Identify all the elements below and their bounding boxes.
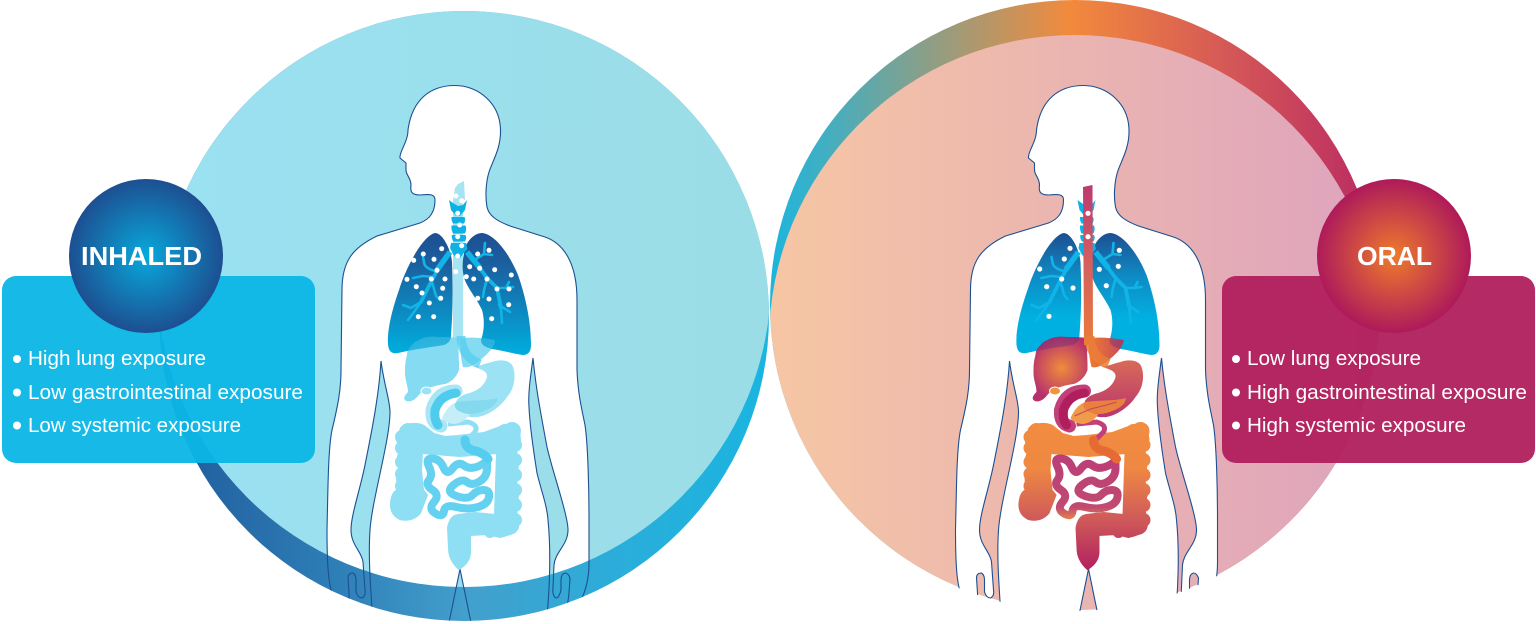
organ overlap over lungs [408,336,495,351]
lung overlap on liver [1036,336,1124,351]
duodenum outer [1060,391,1084,426]
liver lobe [460,338,495,367]
airway particles: inhaled [404,194,514,321]
oral bullet list [1232,348,1527,437]
esophagus: oral [1083,185,1093,345]
inhaled bullet list: High lung exposure [28,348,206,370]
liver [404,337,459,401]
inhaled bullet list [13,348,303,437]
colon [1019,423,1150,569]
pancreas head [1070,402,1098,424]
oral bullet list: High systemic exposure [1247,415,1466,437]
pancreas [1083,398,1126,414]
oral bullet list: High gastrointestinal exposure [1247,382,1527,404]
airway particles: oral [1037,211,1122,319]
small intestine [1056,458,1118,515]
liver [1033,337,1088,401]
inhaled bullet list: Low systemic exposure [28,415,241,437]
badge: oral: ORAL [1357,241,1432,271]
duodenum inner [435,393,456,425]
body silhouette: inhaled [327,86,589,624]
pancreas head [442,402,470,424]
ring: oral crescent [770,0,1380,610]
panel: oral route circle [770,0,1380,624]
panel: inhaled route circle [159,11,769,624]
fundus [461,336,480,364]
liver lobe [1088,338,1124,367]
colon [391,423,521,569]
badge: inhaled: INHALED [81,241,202,271]
stomach [456,360,515,417]
badge: oral [1317,179,1471,333]
badge: inhaled [69,179,223,333]
callout: inhaled exposure box [2,276,315,463]
connector to small intestine [1076,422,1105,441]
light blue circle background [159,11,769,621]
trachea: inhaled [449,200,468,258]
duodenum inner [1063,393,1084,425]
oral bullet list: Low lung exposure [1247,348,1421,370]
pancreatic duct [1074,402,1116,416]
connector to small intestine [448,422,476,441]
esophagus: inhaled [453,181,465,345]
trachea: oral [1078,200,1096,258]
internal organs: oral [1016,185,1160,569]
body silhouette: oral [956,86,1218,624]
jejunum bend [1094,440,1116,459]
fundus [1090,336,1108,364]
stomach [1084,360,1143,417]
lungs: inhaled [388,233,531,355]
gallbladder [421,387,432,395]
gallbladder [1050,387,1060,395]
lungs: oral [1016,233,1160,355]
ring: inhaled crescent [159,11,769,621]
duodenum outer [432,391,456,426]
digestive organs: inhaled [391,336,521,569]
callout: oral exposure box [1222,276,1535,463]
pancreas [455,398,497,414]
jejunum bend [465,440,488,459]
digestive organs: oral [1016,185,1160,569]
peach circle background [770,35,1345,610]
small intestine [428,458,489,515]
inhaled bullet list: Low gastrointestinal exposure [28,382,303,404]
